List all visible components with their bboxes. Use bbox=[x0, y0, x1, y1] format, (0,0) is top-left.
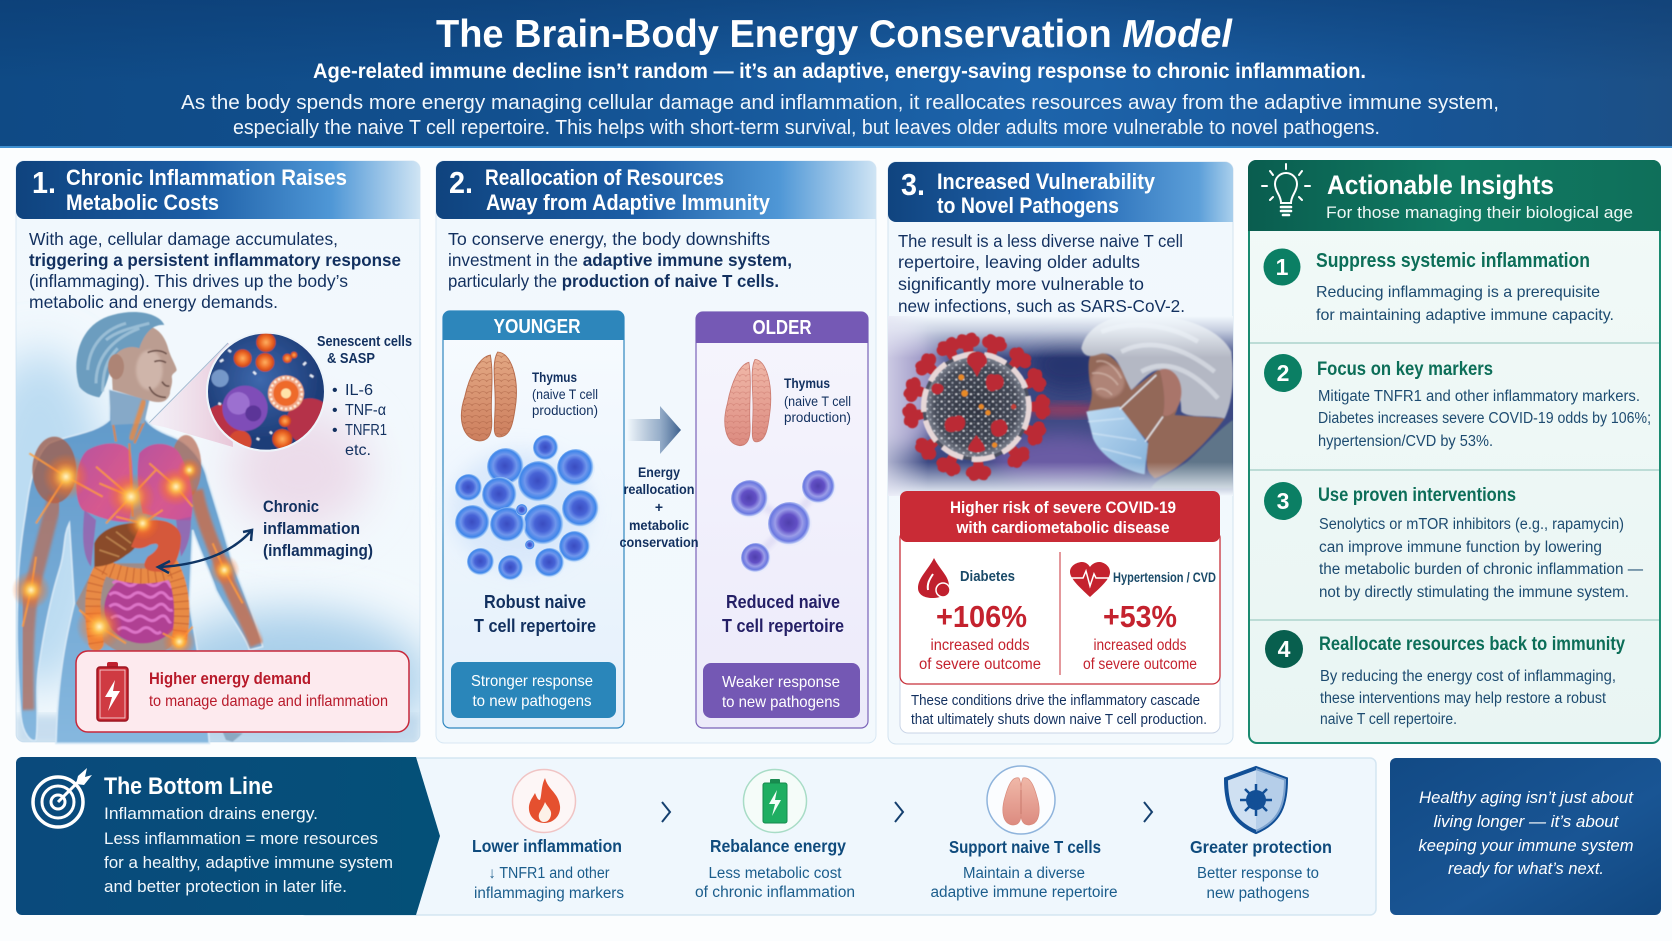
chronic inflammation label: (inflammaging) bbox=[263, 542, 373, 560]
insight 3: the metabolic burden of chronic inflammation — bbox=[1319, 561, 1643, 578]
the bottom line callout: and better protection in later life. bbox=[104, 877, 347, 896]
insight 4 bbox=[1265, 630, 1625, 728]
panel heading: to Novel Pathogens bbox=[937, 193, 1119, 218]
outcome box: Stronger response bbox=[471, 673, 593, 690]
icon: heart bbox=[1070, 562, 1113, 597]
panel 2: reallocation of resources bbox=[436, 161, 876, 743]
icon: target bbox=[33, 768, 92, 827]
card: younger bbox=[443, 311, 624, 728]
outcome box: to new pathogens bbox=[722, 694, 840, 711]
panel heading bbox=[1248, 160, 1661, 231]
arrow label bbox=[620, 464, 698, 550]
card: older bbox=[696, 312, 868, 728]
the bottom line callout bbox=[16, 757, 440, 915]
step: greater protection bbox=[1190, 768, 1332, 902]
closing quote bbox=[1390, 758, 1661, 915]
insight 3: Use proven interventions bbox=[1318, 485, 1516, 506]
card: older: OLDER bbox=[752, 317, 812, 339]
panel text: particularly the production of naive T cells. bbox=[448, 271, 779, 291]
insight 3: 3 bbox=[1277, 488, 1289, 514]
risk box footnote: that ultimately shuts down naive T cell production. bbox=[911, 711, 1207, 728]
arrow bbox=[158, 530, 252, 573]
callout cone to cell view bbox=[149, 343, 233, 447]
insight 2: Mitigate TNFR1 and other inflammatory markers. bbox=[1318, 388, 1640, 405]
inset labels: • bbox=[332, 402, 338, 419]
intro paragraph: As the body spends more energy managing cellular damage and inflammation, it reallocates resources away from the adaptive immune system, bbox=[181, 92, 1499, 114]
thymus label: Thymus bbox=[784, 376, 830, 391]
thymus label: production) bbox=[532, 403, 598, 418]
panel heading: Metabolic Costs bbox=[66, 190, 219, 215]
icon: green battery bbox=[744, 770, 806, 832]
panel text: The result is a less diverse naive T cell bbox=[898, 231, 1183, 251]
chevron bbox=[895, 802, 903, 822]
panel text: (inflammaging). This drives up the body’s bbox=[29, 271, 348, 291]
insight 1: Reducing inflammaging is a prerequisite bbox=[1316, 284, 1600, 301]
panel heading bbox=[16, 161, 420, 219]
thymus label bbox=[532, 370, 598, 418]
stat: hypertension bbox=[1070, 562, 1216, 673]
outcome box bbox=[703, 663, 860, 718]
insight 4: By reducing the energy cost of inflammaging, bbox=[1320, 668, 1616, 685]
insight 1 bbox=[1264, 248, 1614, 324]
inset labels: IL-6 bbox=[345, 382, 373, 399]
insight 1: for maintaining adaptive immune capacity. bbox=[1316, 307, 1614, 324]
panel text bbox=[448, 229, 792, 291]
step: greater protection: Better response to bbox=[1197, 865, 1319, 882]
the bottom line callout: Inflammation drains energy. bbox=[104, 804, 318, 823]
circular cell inset bbox=[206, 334, 324, 452]
panel text: triggering a persistent inflammatory response bbox=[29, 250, 401, 270]
subtitle: Age-related immune decline isn’t random — it’s an adaptive, energy-saving response to chronic inflammation. bbox=[313, 60, 1366, 83]
panel text: repertoire, leaving older adults bbox=[898, 252, 1140, 272]
panel text: metabolic and energy demands. bbox=[29, 292, 278, 312]
inset labels: etc. bbox=[345, 442, 371, 459]
step: support naive T cells: Support naive T cells bbox=[949, 837, 1101, 857]
panel heading: 3. bbox=[901, 167, 925, 202]
stat: hypertension: +53% bbox=[1103, 599, 1177, 634]
panel 4: actionable insights bbox=[1248, 160, 1661, 743]
step: lower inflammation bbox=[472, 770, 624, 902]
callout: higher energy demand bbox=[76, 651, 409, 732]
arrow label: + bbox=[655, 499, 663, 515]
bottom strip: pathway steps bbox=[300, 758, 1376, 915]
icon: battery bbox=[97, 662, 128, 721]
outcome box: to new pathogens bbox=[472, 693, 592, 710]
stat: hypertension: Hypertension / CVD bbox=[1113, 569, 1216, 585]
insight 4: these interventions may help restore a robust bbox=[1320, 690, 1607, 707]
insight 1: 1 bbox=[1276, 254, 1289, 280]
callout: higher energy demand: Higher energy demand bbox=[149, 669, 311, 688]
title: The Brain-Body Energy Conservation Model bbox=[436, 13, 1233, 56]
panel heading: Reallocation of Resources bbox=[485, 165, 724, 190]
panel text: significantly more vulnerable to bbox=[898, 274, 1144, 294]
chronic inflammation label: Chronic bbox=[263, 498, 319, 516]
virus bbox=[901, 332, 1050, 481]
step: rebalance energy bbox=[695, 770, 855, 901]
step: greater protection: new pathogens bbox=[1206, 885, 1310, 902]
risk box header bbox=[900, 491, 1220, 542]
chronic inflammation label: inflammation bbox=[263, 520, 360, 538]
illustration background bbox=[0, 350, 430, 750]
step: rebalance energy: of chronic inflammation bbox=[695, 884, 855, 901]
caption bbox=[722, 592, 844, 636]
step: rebalance energy: Rebalance energy bbox=[710, 836, 846, 856]
caption bbox=[474, 592, 596, 636]
card: younger: YOUNGER bbox=[494, 316, 581, 338]
closing quote: living longer — it’s about bbox=[1434, 812, 1620, 831]
inset labels: • bbox=[332, 382, 338, 399]
header banner bbox=[0, 0, 1672, 148]
the bottom line callout: Less inflammation = more resources bbox=[104, 829, 378, 848]
icon: thymus bbox=[725, 359, 771, 446]
chevron bbox=[662, 802, 670, 822]
risk box header: with cardiometabolic disease bbox=[956, 518, 1170, 537]
step: rebalance energy: Less metabolic cost bbox=[708, 865, 842, 882]
icon: light bulb bbox=[1262, 164, 1310, 215]
chevron bbox=[1144, 802, 1152, 822]
panel text: To conserve energy, the body downshifts bbox=[448, 229, 770, 249]
closing quote: keeping your immune system bbox=[1418, 836, 1634, 855]
outcome box: Weaker response bbox=[722, 674, 840, 691]
icon: blood drop bbox=[918, 558, 950, 598]
insight 2: Focus on key markers bbox=[1317, 359, 1493, 380]
step: support naive T cells: Maintain a diverse bbox=[963, 865, 1085, 882]
insight 4: naive T cell repertoire. bbox=[1320, 711, 1457, 728]
insight 4: Reallocate resources back to immunity bbox=[1319, 634, 1625, 655]
insight 3: not by directly stimulating the immune system. bbox=[1319, 584, 1629, 601]
panel heading bbox=[436, 161, 876, 219]
inset labels: Senescent cells bbox=[317, 334, 412, 350]
icon: flame bbox=[512, 770, 576, 832]
chronic inflammation label bbox=[263, 498, 373, 560]
panel text: With age, cellular damage accumulates, bbox=[29, 229, 338, 249]
step: greater protection: Greater protection bbox=[1190, 837, 1332, 857]
icon: thymus in circle bbox=[987, 766, 1055, 834]
step: lower inflammation: ↓ TNFR1 and other bbox=[488, 865, 610, 882]
illustration: reduced T cells bbox=[731, 470, 836, 573]
arrow label: reallocation bbox=[624, 481, 694, 497]
caption: T cell repertoire bbox=[474, 616, 596, 636]
human body illustration bbox=[12, 312, 263, 743]
stat: hypertension: of severe outcome bbox=[1083, 656, 1197, 673]
arrow label: Energy bbox=[638, 464, 680, 480]
caption: Robust naive bbox=[484, 592, 586, 612]
insight 2: hypertension/CVD by 53%. bbox=[1318, 433, 1493, 450]
inset labels: • bbox=[332, 422, 338, 439]
intro paragraph bbox=[181, 92, 1499, 139]
closing quote: Healthy aging isn’t just about bbox=[1419, 788, 1634, 807]
risk box footnote: These conditions drive the inflammatory cascade bbox=[911, 692, 1200, 709]
panel 1: chronic inflammation bbox=[0, 161, 430, 750]
the bottom line callout: for a healthy, adaptive immune system bbox=[104, 853, 393, 872]
stat: hypertension: increased odds bbox=[1094, 637, 1187, 654]
step: support naive T cells bbox=[930, 766, 1118, 901]
panel text bbox=[898, 231, 1185, 316]
image fades bbox=[888, 316, 1233, 358]
inset labels: & SASP bbox=[327, 351, 375, 367]
icon: thymus bbox=[461, 352, 516, 441]
insight 4: 4 bbox=[1278, 636, 1291, 662]
panel heading: Away from Adaptive Immunity bbox=[486, 190, 771, 215]
closing quote: ready for what’s next. bbox=[1448, 859, 1604, 878]
panel heading bbox=[888, 162, 1233, 222]
panel heading: 1. bbox=[32, 165, 56, 200]
inset labels: TNFR1 bbox=[345, 422, 387, 439]
arrow label: conservation bbox=[620, 534, 698, 550]
thymus label: (naive T cell bbox=[532, 387, 598, 402]
insight 1: Suppress systemic inflammation bbox=[1316, 250, 1590, 272]
step: lower inflammation: Lower inflammation bbox=[472, 836, 622, 856]
insight 3 bbox=[1264, 482, 1643, 601]
the bottom line callout: The Bottom Line bbox=[104, 773, 273, 800]
icon: shield bbox=[1226, 768, 1286, 832]
inset labels bbox=[317, 334, 412, 459]
risk box bbox=[900, 491, 1220, 733]
stat: diabetes: of severe outcome bbox=[919, 656, 1041, 673]
caption: T cell repertoire bbox=[722, 616, 844, 636]
risk box header: Higher risk of severe COVID-19 bbox=[950, 498, 1176, 517]
older man with mask bbox=[1081, 314, 1233, 488]
panel text bbox=[29, 229, 401, 312]
insight 3: Senolytics or mTOR inhibitors (e.g., rapamycin) bbox=[1319, 516, 1624, 533]
step: support naive T cells: adaptive immune repertoire bbox=[930, 884, 1118, 901]
stat: diabetes: increased odds bbox=[930, 637, 1030, 654]
caption: Reduced naive bbox=[726, 592, 840, 612]
panel heading: Actionable Insights bbox=[1327, 170, 1554, 200]
panel heading: Chronic Inflammation Raises bbox=[66, 165, 347, 190]
outcome box bbox=[451, 662, 616, 718]
illustration: virus and masked older man bbox=[888, 316, 1233, 496]
panel heading: For those managing their biological age bbox=[1326, 203, 1633, 222]
panel heading: 2. bbox=[449, 165, 473, 200]
arrow label: metabolic bbox=[629, 517, 689, 533]
thymus label: (naive T cell bbox=[784, 394, 851, 409]
risk box footnote bbox=[911, 692, 1207, 728]
insight 2: 2 bbox=[1277, 360, 1289, 386]
illustration: robust naive T cells bbox=[450, 435, 600, 581]
panel heading: Increased Vulnerability bbox=[937, 169, 1156, 194]
stat: diabetes bbox=[918, 558, 1041, 673]
intro paragraph: especially the naive T cell repertoire. This helps with short-term survival, but leaves older adults more vulnerable to novel pathogens. bbox=[233, 117, 1380, 139]
thymus label: Thymus bbox=[532, 370, 577, 385]
insight 2 bbox=[1264, 354, 1651, 450]
panel text: new infections, such as SARS-CoV-2. bbox=[898, 296, 1185, 316]
callout: higher energy demand: to manage damage and inflammation bbox=[149, 693, 388, 710]
arrow: energy reallocation bbox=[627, 406, 681, 454]
thymus label bbox=[784, 376, 851, 425]
inset labels: TNF-α bbox=[345, 402, 386, 419]
panel 3: increased vulnerability bbox=[852, 162, 1233, 744]
stat: diabetes: +106% bbox=[936, 599, 1027, 634]
panel text: investment in the adaptive immune system, bbox=[448, 250, 792, 270]
stat: diabetes: Diabetes bbox=[960, 569, 1015, 585]
step: lower inflammation: inflammaging markers bbox=[474, 885, 624, 902]
thymus label: production) bbox=[784, 410, 851, 425]
insight 3: can improve immune function by lowering bbox=[1319, 539, 1602, 556]
